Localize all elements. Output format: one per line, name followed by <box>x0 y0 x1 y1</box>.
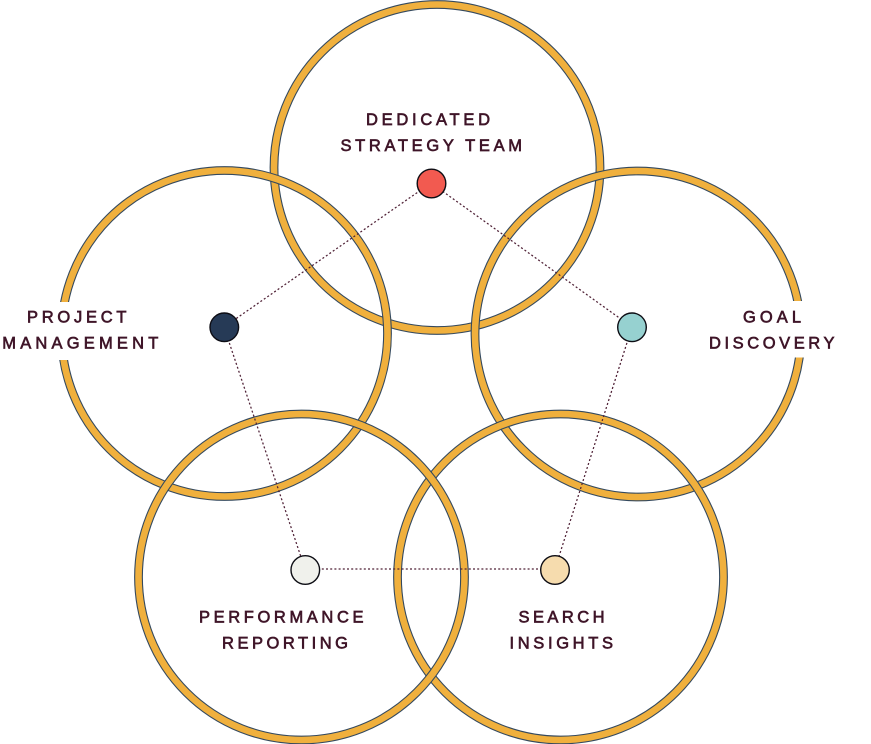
node: peach <box>541 556 569 584</box>
ring: goal discovery <box>475 171 816 497</box>
label: goal discovery: DISCOVERY <box>709 335 834 353</box>
node: red <box>417 169 446 198</box>
label: dedicated strategy team: DEDICATED <box>366 111 490 129</box>
label: project management: PROJECT <box>27 308 126 326</box>
node: light grey <box>291 556 320 584</box>
ring: search insights <box>398 414 724 740</box>
label: goal discovery: GOAL <box>743 309 801 327</box>
label: search insights <box>510 608 613 653</box>
label: project management <box>2 308 158 353</box>
ring: dedicated strategy team <box>274 4 600 330</box>
node: navy <box>210 313 239 342</box>
label: performance reporting: REPORTING <box>222 635 348 653</box>
label: performance reporting <box>199 608 364 653</box>
label: search insights: SEARCH <box>518 608 604 626</box>
label: goal discovery <box>709 309 834 353</box>
label: performance reporting: PERFORMANCE <box>199 608 364 626</box>
ring: performance reporting <box>138 414 464 740</box>
ring: project management <box>48 170 388 496</box>
dotted connector pentagon <box>224 183 632 569</box>
label: dedicated strategy team <box>340 111 522 155</box>
label: search insights: INSIGHTS <box>510 635 613 653</box>
node: teal <box>618 313 646 342</box>
label: dedicated strategy team: STRATEGY TEAM <box>340 137 522 155</box>
label: project management: MANAGEMENT <box>2 335 158 353</box>
